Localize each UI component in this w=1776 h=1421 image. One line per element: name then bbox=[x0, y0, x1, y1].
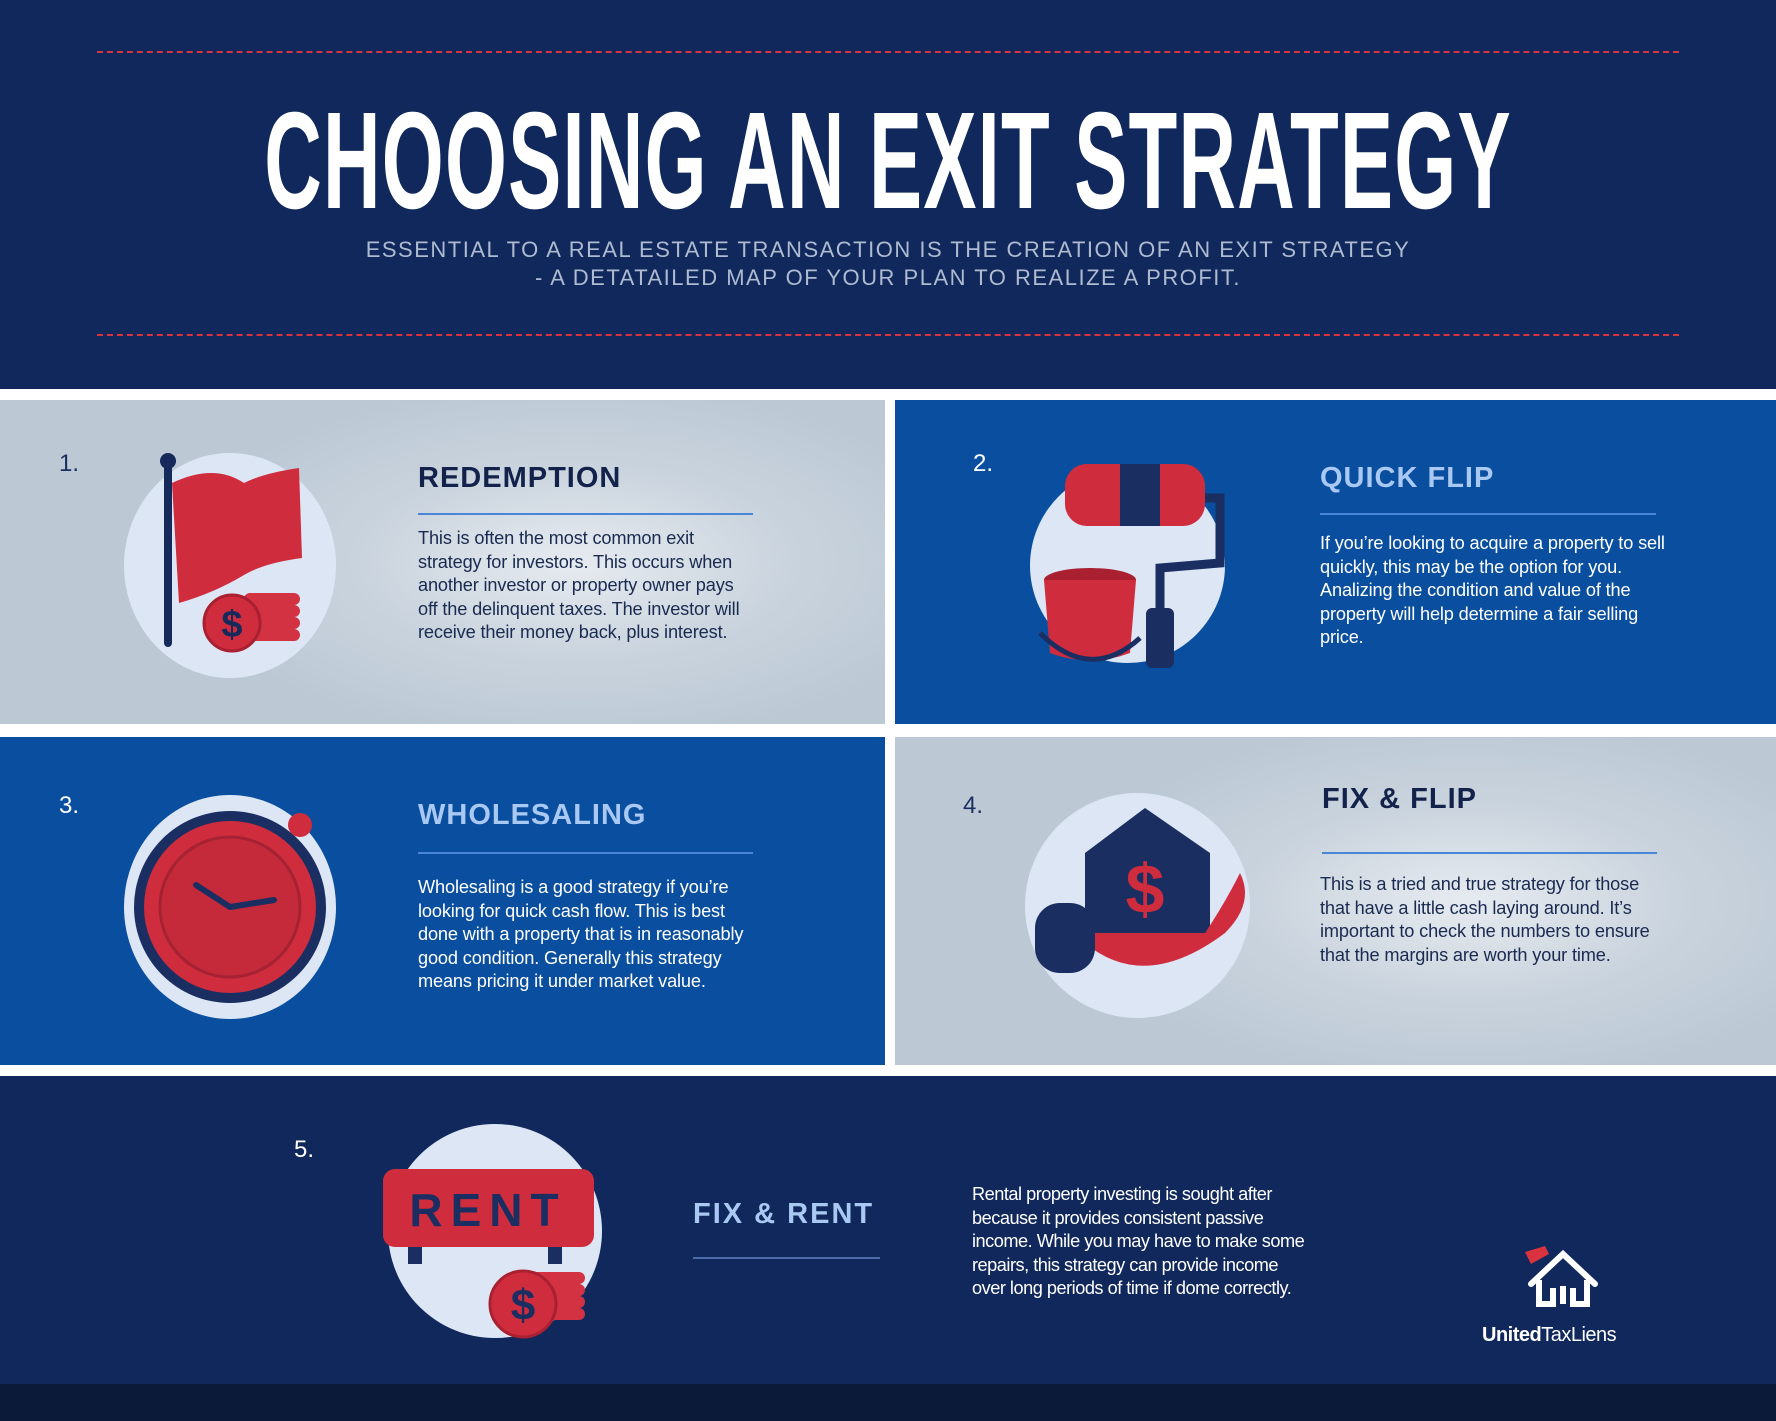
panel: wholesaling bbox=[0, 737, 885, 1065]
body text: Rental property investing is sought after because it provides consistent passive income. While you may have to make some repairs, this strategy can provide income over long periods of time if dome correctly. bbox=[972, 1184, 1304, 1298]
panel: fix and rent bbox=[0, 1076, 1776, 1384]
panel: fix and flip bbox=[895, 737, 1776, 1065]
logo: UnitedTaxLiens bbox=[1482, 1324, 1616, 1346]
title: CHOOSING AN EXIT STRATEGY bbox=[264, 84, 1512, 238]
icon: rent sign with coins: RENT bbox=[409, 1184, 567, 1236]
subtitle: - A DETATAILED MAP OF YOUR PLAN TO REALIZE A PROFIT. bbox=[535, 265, 1241, 290]
subtitle bbox=[366, 237, 1410, 290]
logo bbox=[1482, 1246, 1616, 1346]
heading: FIX & FLIP bbox=[1322, 783, 1477, 815]
number 1: 1. bbox=[59, 450, 79, 477]
heading: WHOLESALING bbox=[418, 799, 646, 831]
body text: This is often the most common exit strategy for investors. This occurs when another investor or property owner pays off the delinquent taxes. The investor will receive their money back, plus interest. bbox=[418, 528, 739, 642]
body text: If you’re looking to acquire a property to sell quickly, this may be the option for you. Analizing the condition and value of the property will help determine a fair selling price. bbox=[1320, 533, 1665, 647]
icon: flag with coins bbox=[124, 453, 336, 678]
icon: rent sign with coins bbox=[383, 1124, 602, 1338]
subtitle: ESSENTIAL TO A REAL ESTATE TRANSACTION IS THE CREATION OF AN EXIT STRATEGY bbox=[366, 237, 1410, 262]
panel: redemption bbox=[0, 400, 885, 724]
header bbox=[0, 0, 1776, 389]
number 3: 3. bbox=[59, 792, 79, 819]
bottom strip bbox=[0, 1384, 1776, 1421]
number 2: 2. bbox=[973, 450, 993, 477]
body text: This is a tried and true strategy for those that have a little cash laying around. It’s important to check the numbers to ensure that the margins are worth your time. bbox=[1320, 874, 1650, 964]
icon: hand holding house: $ bbox=[1126, 850, 1164, 928]
body text: Wholesaling is a good strategy if you’re looking for quick cash flow. This is best done with a property that is in reasonably good condition. Generally this strategy means pricing it under market value. bbox=[418, 877, 743, 991]
icon: paint roller bbox=[1030, 464, 1225, 668]
icon: hand holding house bbox=[1025, 793, 1250, 1018]
icon: flag with coins: $ bbox=[221, 604, 243, 646]
icon: clock bbox=[124, 795, 336, 1019]
heading: REDEMPTION bbox=[418, 462, 621, 494]
number 4: 4. bbox=[963, 792, 983, 819]
heading: FIX & RENT bbox=[693, 1198, 874, 1230]
icon: rent sign with coins: $ bbox=[511, 1281, 535, 1330]
number 5: 5. bbox=[294, 1136, 314, 1163]
heading: QUICK FLIP bbox=[1320, 462, 1494, 494]
panel: quick flip bbox=[895, 400, 1776, 724]
